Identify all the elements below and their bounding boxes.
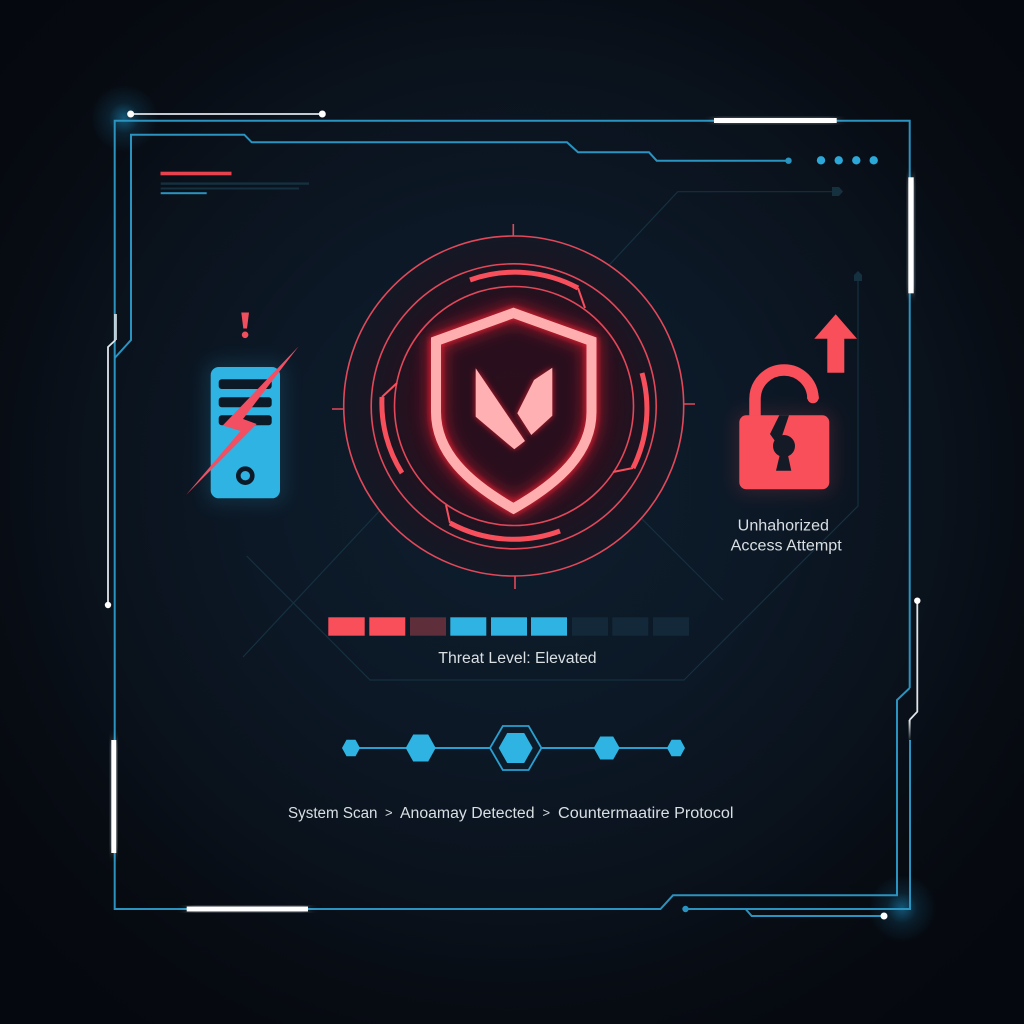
label: unauthorized access: Access Attempt	[731, 538, 842, 555]
white accent traces with end dots	[105, 110, 921, 920]
icon: broken open padlock	[735, 370, 834, 494]
shield check mark	[476, 368, 552, 449]
process steps label: System Scan	[288, 805, 378, 822]
status dots	[817, 156, 878, 164]
process steps label	[288, 805, 734, 822]
lightning bolt	[186, 346, 298, 495]
shield outline	[436, 313, 592, 508]
process steps label: Anoamay Detected	[400, 805, 534, 822]
label: unauthorized access	[731, 518, 842, 555]
process steps label: >	[385, 805, 393, 820]
shield glow	[436, 313, 592, 508]
frame nodes	[682, 158, 792, 912]
faint circuit traces	[243, 187, 862, 680]
exclamation mark	[241, 312, 249, 338]
threat level meter	[328, 617, 689, 636]
header status lines	[160, 172, 309, 194]
process steps label: Countermaatire Protocol	[558, 805, 734, 822]
threat level label: Threat Level: Elevated	[438, 650, 597, 667]
white glowing frame bars	[111, 118, 914, 912]
frame: outer and inner circuit lines	[115, 121, 910, 916]
hexagon process chain	[342, 726, 685, 770]
segmented arcs	[382, 272, 647, 539]
icon: compromised server	[186, 312, 298, 504]
central shield emblem	[332, 224, 695, 589]
icon: up arrow	[814, 314, 857, 373]
label: unauthorized access: Unhahorized	[738, 518, 829, 535]
process steps label: >	[542, 805, 550, 820]
reticle disk and rings	[332, 224, 695, 589]
keyhole crack	[770, 415, 795, 471]
corner glows	[90, 84, 936, 942]
